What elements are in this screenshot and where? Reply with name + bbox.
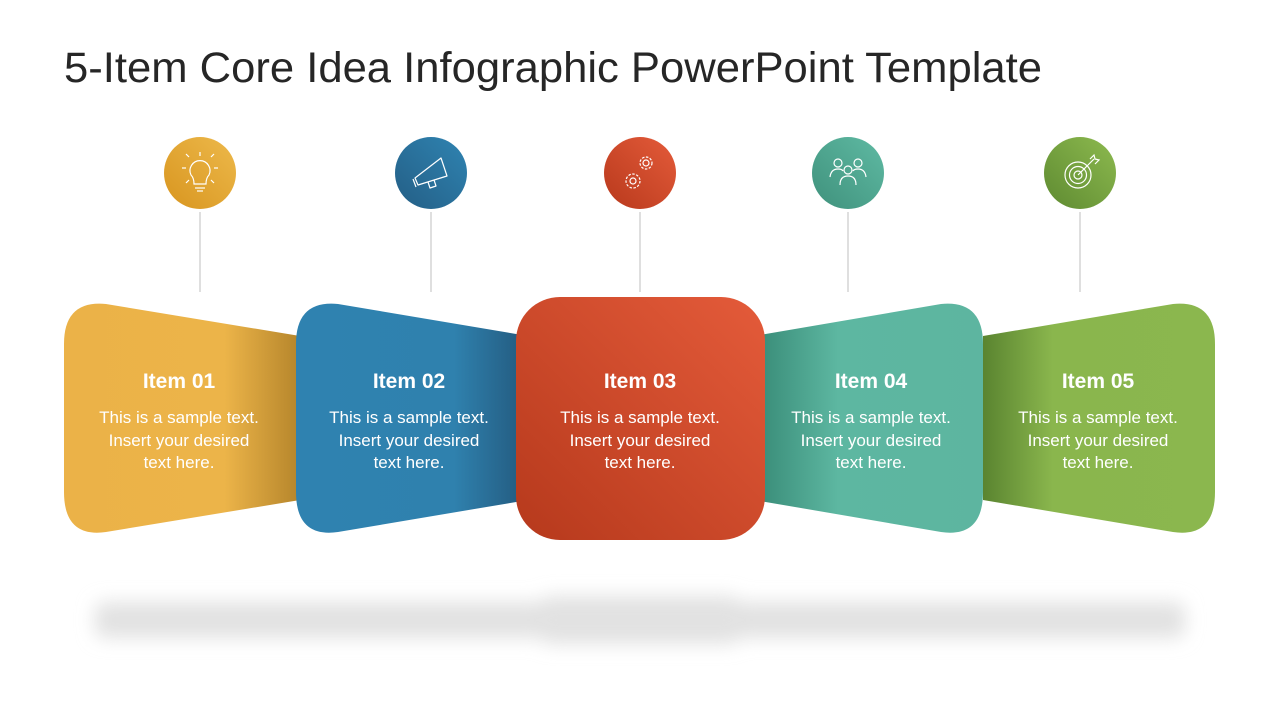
shadow	[95, 596, 1185, 644]
panel: item 03: text here.	[605, 453, 675, 472]
panel: item 05	[983, 304, 1215, 533]
connector lines	[200, 212, 1080, 292]
panel: item 05: text here.	[1063, 453, 1133, 472]
panel: item 02: text here.	[374, 453, 444, 472]
icon: target	[1044, 137, 1116, 209]
panel: item 02: Insert your desired	[339, 431, 479, 450]
icon: gears	[604, 137, 676, 209]
panel: item 01: Insert your desired	[109, 431, 249, 450]
panel: item 02: Item 02	[373, 370, 445, 393]
panel: item 01: This is a sample text.	[99, 408, 259, 427]
icon: megaphone	[395, 137, 467, 209]
panel: item 03	[516, 297, 765, 540]
icon: people	[812, 137, 884, 209]
panel: item 05: Insert your desired	[1028, 431, 1168, 450]
icon: light bulb	[164, 137, 236, 209]
panel: item 02	[296, 304, 522, 533]
panel: item 03: This is a sample text.	[560, 408, 720, 427]
panel: item 04: text here.	[836, 453, 906, 472]
panel: item 01	[64, 304, 300, 533]
panel: item 03: Insert your desired	[570, 431, 710, 450]
panel: item 04: This is a sample text.	[791, 408, 951, 427]
panel: item 05: This is a sample text.	[1018, 408, 1178, 427]
panel: item 01: text here.	[144, 453, 214, 472]
panel: item 02: This is a sample text.	[329, 408, 489, 427]
panel: item 04	[760, 304, 983, 533]
panel: item 04: Item 04	[835, 370, 908, 393]
panel: item 03: Item 03	[604, 370, 676, 393]
title: 5-Item Core Idea Infographic PowerPoint Template	[64, 44, 1042, 92]
panel: item 05: Item 05	[1062, 370, 1135, 393]
panel: item 01: Item 01	[143, 370, 216, 393]
panel: item 04: Insert your desired	[801, 431, 941, 450]
